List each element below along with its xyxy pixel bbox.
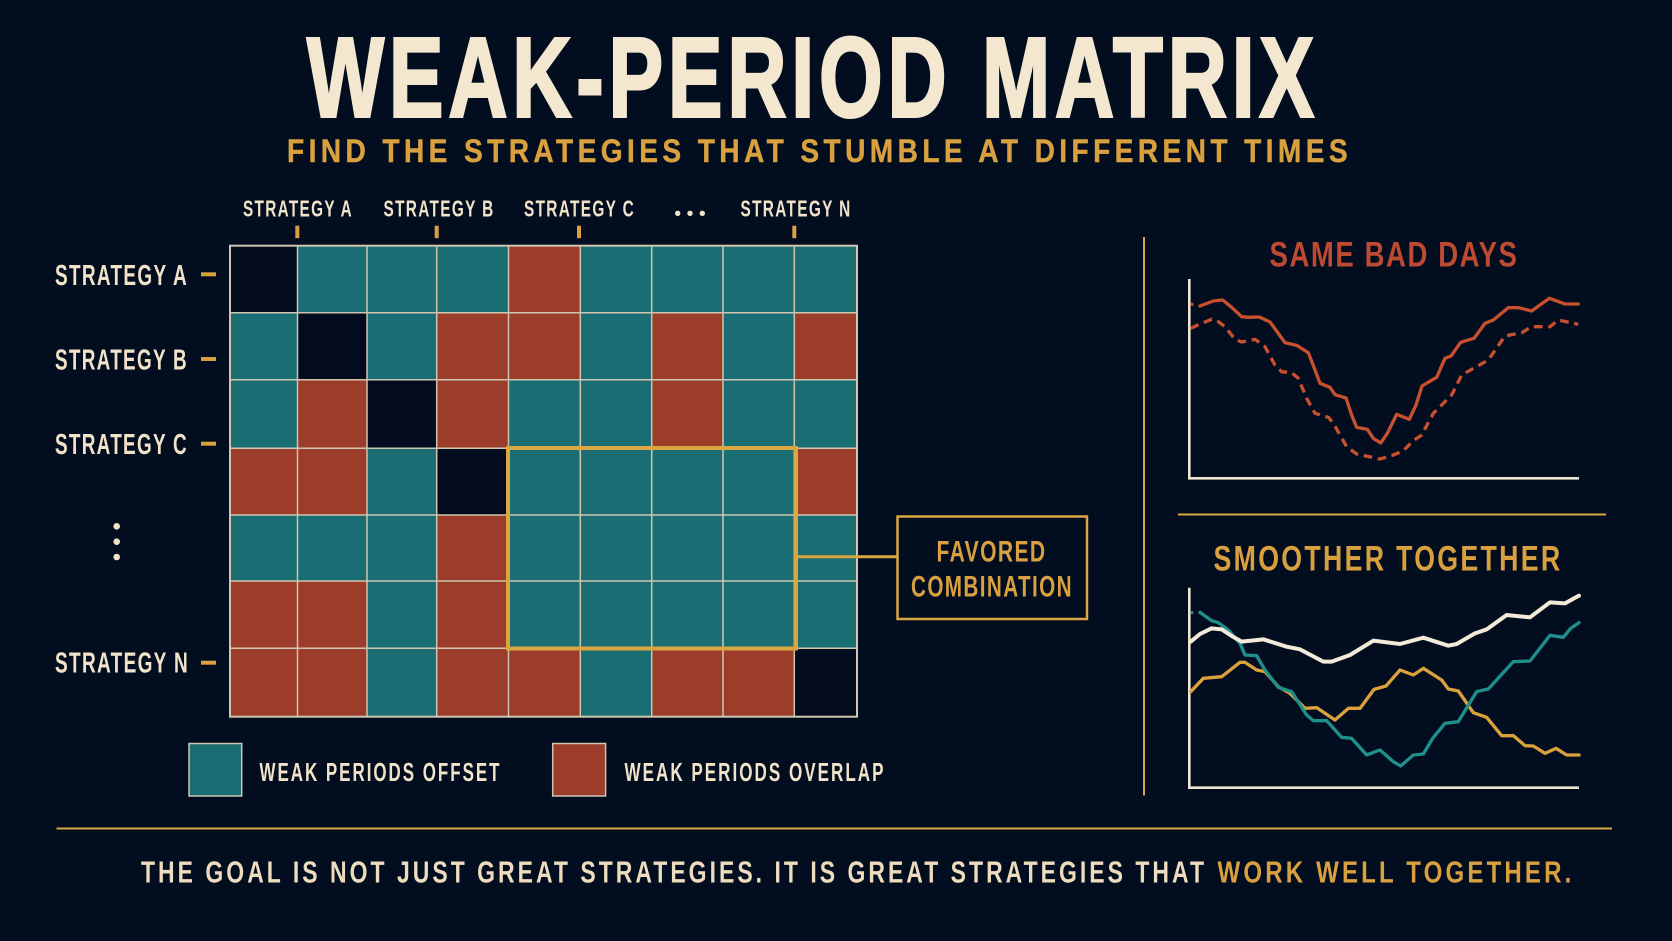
legend: weak periods overlap: WEAK PERIODS OVERLAP: [624, 759, 886, 787]
column headers: STRATEGY B: [384, 196, 494, 222]
matrix row N: [230, 648, 857, 717]
line chart: smoother together: [1189, 588, 1579, 788]
matrix row A: [230, 246, 857, 313]
row headers: [55, 260, 216, 680]
line chart: same bad days: [1189, 279, 1579, 478]
legend: weak periods overlap: [553, 744, 886, 796]
callout: favored combination: FAVORED: [936, 536, 1046, 569]
matrix row B: [230, 313, 857, 380]
matrix row E: [230, 515, 857, 581]
chart heading: smoother together: SMOOTHER TOGETHER: [1214, 540, 1562, 579]
callout: favored combination: COMBINATION: [911, 571, 1073, 604]
legend: weak periods offset: WEAK PERIODS OFFSET: [260, 759, 502, 787]
column headers: [243, 196, 852, 238]
matrix row F: [230, 581, 857, 648]
footer takeaway: WORK WELL TOGETHER.: [1218, 856, 1574, 890]
row headers: STRATEGY B: [55, 344, 188, 376]
column headers: STRATEGY A: [243, 196, 353, 222]
footer takeaway: THE GOAL IS NOT JUST GREAT STRATEGIES. IT IS GREAT STRATEGIES THAT: [141, 856, 1207, 890]
matrix row C: [230, 380, 857, 448]
row headers: STRATEGY N: [55, 648, 189, 680]
row headers: STRATEGY A: [55, 260, 188, 292]
row headers: STRATEGY C: [55, 429, 188, 461]
vertical divider: [1143, 237, 1145, 796]
chart heading: same bad days: SAME BAD DAYS: [1270, 236, 1518, 275]
legend: weak periods offset: [189, 744, 502, 796]
footer rule: [56, 828, 1612, 830]
column headers: STRATEGY C: [524, 196, 635, 222]
matrix row D: [230, 448, 857, 515]
horizontal chart divider: [1178, 514, 1606, 516]
column headers: STRATEGY N: [740, 196, 852, 222]
title: WEAK-PERIOD MATRIX: [307, 14, 1319, 140]
favored combination highlight box: [508, 448, 796, 648]
callout: favored combination: [796, 516, 1087, 619]
matrix heatmap: [230, 246, 857, 717]
subtitle: FIND THE STRATEGIES THAT STUMBLE AT DIFFERENT TIMES: [287, 133, 1352, 169]
